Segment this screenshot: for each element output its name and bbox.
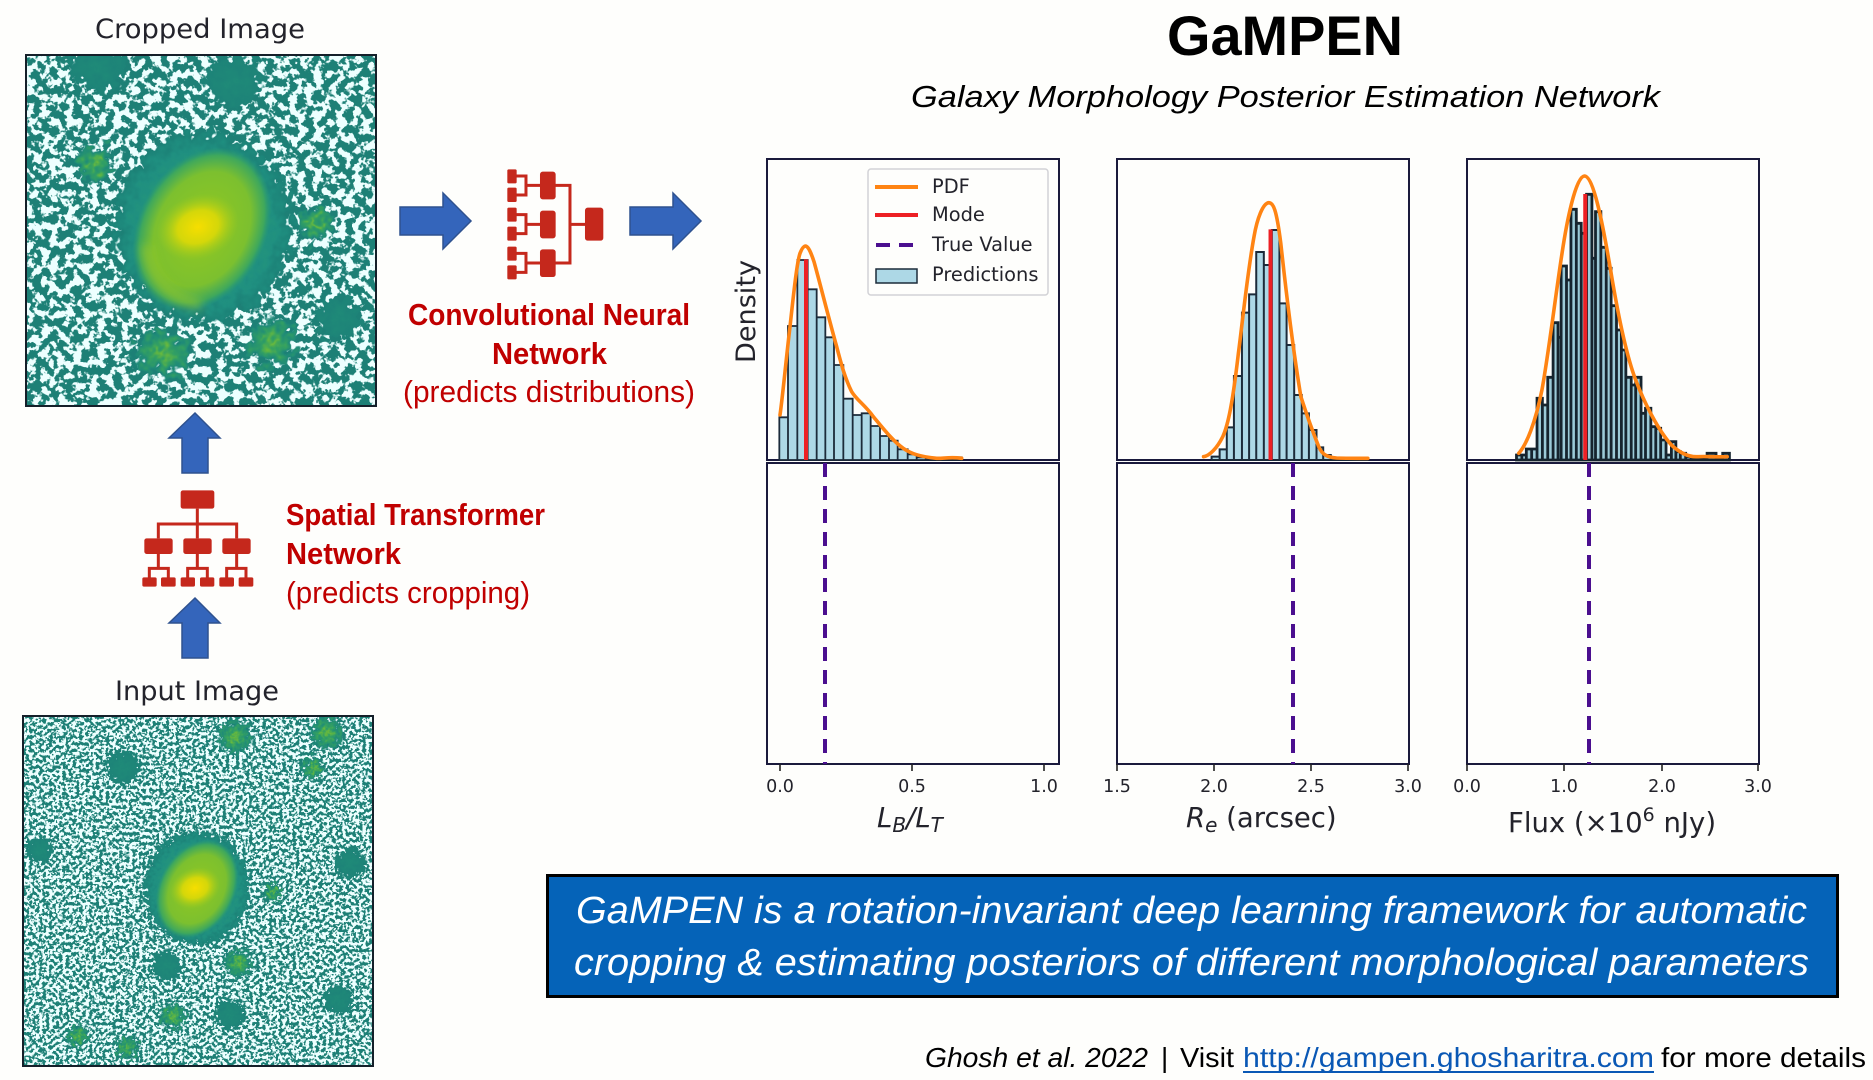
chart: Re true value panel: (arcsec) (1217, 802, 1337, 834)
legend: Mode (932, 203, 985, 226)
citation footer: Visit (1180, 1042, 1234, 1073)
chart: flux true value panel (1453, 463, 1772, 839)
chart: Re true value panel: e (1205, 813, 1217, 837)
chart: Re true value panel: 3.0 (1394, 777, 1422, 797)
callout: summary box: cropping & estimating posteriors of different morphological parameters (574, 942, 1809, 984)
chart: Re true value panel: 2.5 (1297, 777, 1325, 797)
chart: LB/LT histogram panel (767, 159, 1059, 466)
arrow: cnn to distributions (630, 193, 701, 249)
arrow: up to cropped image (169, 413, 220, 473)
chart: flux true value panel: 2.0 (1648, 777, 1676, 797)
chart: flux true value panel: nJy) (1655, 807, 1716, 839)
chart: LB/LT true value panel: L (877, 802, 892, 834)
y axis label: density: Density (731, 260, 762, 363)
chart: Re histogram panel (1117, 159, 1409, 466)
chart: LB/LT true value panel: 0.0 (766, 777, 794, 797)
citation footer: for more details (1661, 1042, 1866, 1073)
callout: summary box (548, 876, 1838, 996)
callout: summary box: GaMPEN is a rotation-invariant deep learning framework for automatic (576, 890, 1807, 932)
chart: flux true value panel: Flux (×10 (1508, 807, 1643, 839)
chart: LB/LT true value panel: /L (903, 802, 931, 834)
chart: flux true value panel: 6 (1643, 804, 1655, 826)
chart: flux true value panel: 1.0 (1550, 777, 1578, 797)
image: cropped galaxy (26, 46, 376, 406)
chart: Re true value panel: 2.0 (1200, 777, 1228, 797)
chart: flux histogram panel (1467, 159, 1759, 466)
label: spatial transformer network: (predicts cropping) (286, 575, 530, 610)
image: input galaxy (23, 715, 373, 1066)
title: GaMPEN (1167, 4, 1403, 67)
chart: LB/LT true value panel: T (931, 813, 945, 837)
label: convolutional neural network: (predicts distributions) (403, 374, 695, 409)
label: spatial transformer network: Spatial Transformer (286, 497, 545, 532)
chart: flux true value panel: 0.0 (1453, 777, 1481, 797)
chart: Re true value panel: 1.5 (1103, 777, 1131, 797)
chart: LB/LT true value panel (766, 463, 1059, 837)
citation footer: | (1161, 1042, 1168, 1073)
citation footer: Ghosh et al. 2022 (925, 1042, 1148, 1073)
citation footer (925, 1042, 1866, 1073)
label: convolutional neural network (403, 297, 695, 409)
legend: Predictions (932, 263, 1038, 286)
label: spatial transformer network (286, 497, 545, 610)
chart: LB/LT true value panel: 1.0 (1030, 777, 1058, 797)
subtitle: Galaxy Morphology Posterior Estimation Network (911, 79, 1662, 114)
arrow: cropped image to cnn (400, 193, 471, 249)
chart: Re true value panel (1103, 463, 1422, 837)
chart: Re true value panel: R (1186, 802, 1205, 834)
label: spatial transformer network: Network (286, 536, 402, 571)
chart: LB/LT true value panel: B (892, 813, 906, 837)
legend: PDF (932, 175, 970, 198)
icon: spatial transformer network (142, 490, 253, 587)
legend: True Value (931, 233, 1033, 256)
heading: input image: Input Image (115, 676, 279, 707)
chart: LB/LT true value panel: 0.5 (898, 777, 926, 797)
icon: convolutional neural network (507, 169, 603, 279)
legend (868, 169, 1048, 295)
chart: flux true value panel: 3.0 (1744, 777, 1772, 797)
arrow: input image up (169, 598, 220, 658)
label: convolutional neural network: Network (492, 336, 608, 371)
label: convolutional neural network: Convolutional Neural (408, 297, 690, 332)
citation footer: http://gampen.ghosharitra.com (1243, 1042, 1654, 1073)
heading: cropped image: Cropped Image (95, 14, 305, 45)
